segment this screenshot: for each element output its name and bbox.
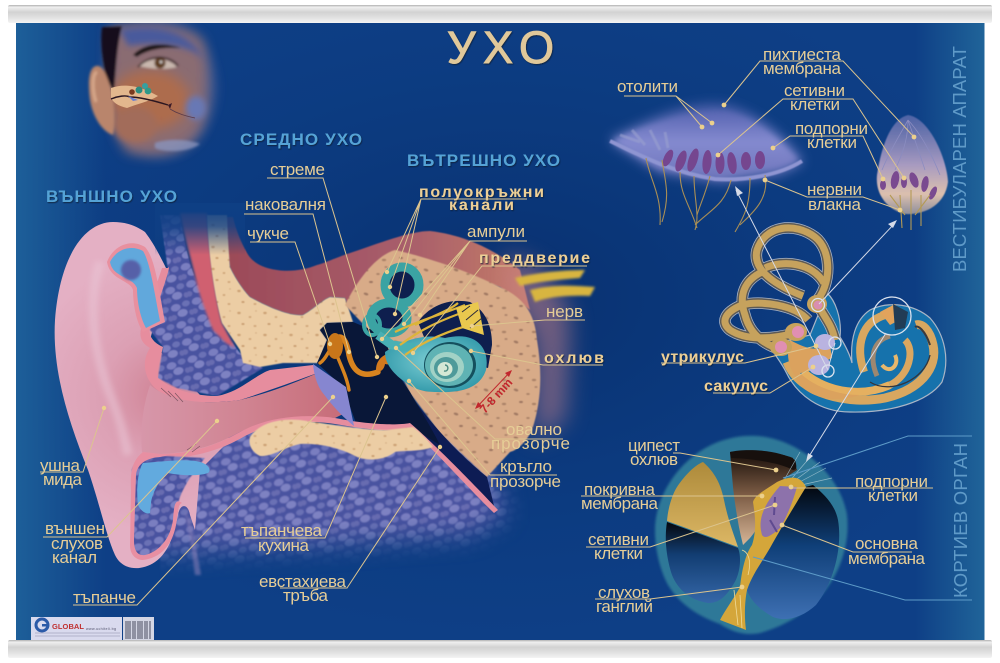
illustration: bony labyrinth: [725, 228, 946, 412]
label: round window: кръгло: [500, 457, 552, 476]
illustration: organ of Corti: [655, 436, 848, 634]
label: sensory cells, macula: клетки: [790, 95, 840, 114]
illustration: ear cross-section: [55, 203, 595, 580]
auditory nerve bundles: [515, 270, 595, 302]
label: supporting cells, organ of Corti: [789, 472, 933, 505]
heading: inner ear: ВЪТРЕШНО УХО: [407, 151, 560, 170]
label: eustachian tube: евстахиева: [259, 572, 347, 591]
temporal bone, upper: [207, 215, 353, 367]
label: tympanic cavity: кухина: [258, 536, 310, 555]
ossicles: [320, 333, 398, 390]
semicircular canals: [725, 228, 835, 350]
semicircular canals: [364, 267, 419, 335]
right blue shade on the face: [186, 96, 206, 120]
label: supporting cells, organ of Corti: клетки: [868, 486, 918, 505]
vestibular nerve fibres: [395, 303, 480, 355]
icon: publisher logo: [36, 619, 49, 631]
label: sensory cells, macula: сетивни: [784, 81, 845, 100]
label: stapes: стреме: [270, 160, 325, 179]
semicircular canal openings: [389, 271, 415, 299]
nerve fibres: [646, 158, 766, 232]
purple sensory cells: [760, 486, 797, 537]
label: tectorial membrane: покривна: [584, 480, 656, 499]
label: cochlear membrane: ципест: [628, 436, 680, 455]
label: pinna: ушна: [40, 456, 81, 475]
icon: warm cheek: [110, 70, 190, 130]
dark space behind the nerve: [418, 301, 492, 368]
right chamber: [747, 485, 839, 619]
inner pinna fold highlight: [93, 262, 128, 455]
lower canal wall: [160, 416, 498, 513]
maroon tissue band: [223, 217, 530, 315]
top hanging rail: [8, 5, 992, 23]
label: supporting cells, organ of Corti: подпорни: [855, 472, 928, 491]
publisher website: www.uchiteli.bg: [86, 627, 116, 631]
icon: lips and chin: [155, 140, 200, 151]
label: ampullae: ампули: [467, 222, 525, 241]
label: round window: прозорче: [490, 472, 561, 491]
lower bone: [249, 420, 433, 459]
label: semicircular canals: полуокръжни: [419, 184, 544, 201]
label: utricle: утрикулус: [661, 349, 744, 366]
label: oval window: прозорче: [491, 434, 570, 453]
ampullae: [770, 295, 827, 356]
red muscle band: [180, 213, 235, 348]
lower left chamber: [666, 522, 740, 603]
label: basilar membrane: мембрана: [848, 549, 926, 568]
label: basilar membrane: [780, 523, 926, 568]
label: pinna: [40, 406, 106, 489]
scala vestibuli yellow: [667, 462, 738, 547]
pointer arrows between the diagrams: [735, 186, 897, 462]
label: tympanic cavity: тъпанчева: [241, 521, 323, 540]
label: external auditory canal: [43, 419, 219, 567]
label: otoliths: отолити: [617, 77, 678, 96]
publisher name: GLOBAL: [52, 622, 84, 631]
glow behind inner ear bone: [505, 255, 570, 440]
label: otoliths: [617, 77, 714, 129]
black top band: [730, 450, 796, 470]
label: incus: наковалня: [245, 195, 326, 214]
label: gelatinous membrane: пихтиеста: [763, 45, 842, 64]
lower cell pocket: [132, 456, 205, 556]
vestibule tan base: [788, 340, 860, 399]
label: semicircular canals: [385, 184, 544, 316]
illustration: crista ampullaris: [877, 115, 948, 230]
label: sensory cells, organ of Corti: сетивни: [588, 530, 649, 549]
illustration: macula (statoconial membrane): [610, 104, 803, 232]
icon: eye: [139, 59, 177, 69]
label: cochlear membrane: охлюв: [630, 450, 678, 469]
label: stapes: [267, 160, 379, 359]
cochlea spiral: [424, 342, 476, 388]
label: nerve: нерв: [546, 302, 583, 321]
hair cells: [661, 147, 765, 175]
label: oval window: [394, 346, 570, 453]
label: utricle: [661, 344, 818, 366]
label: supporting cells, macula: [771, 119, 885, 181]
label: vestibule: преддверие: [479, 250, 590, 267]
label: nerve fibres: [763, 178, 902, 214]
label: spiral ganglion: [595, 583, 744, 616]
outer teal wall: [655, 436, 848, 634]
lower cell tissue: [160, 424, 517, 568]
label: spiral ganglion: слухов: [598, 583, 650, 602]
eardrum: [313, 364, 354, 426]
label: nerve fibres: влакна: [808, 195, 862, 214]
eustachian tube dark channel: [385, 392, 495, 510]
label: pinna: мида: [43, 470, 83, 489]
label: sensory cells, organ of Corti: клетки: [594, 544, 643, 563]
earlobe lilac fade: [184, 510, 201, 575]
icon: face skin: [108, 24, 208, 155]
label: cochlear membrane: [628, 436, 778, 472]
pinna outline: [55, 222, 230, 568]
scala media: [730, 451, 797, 545]
lower ear blue cartilage: [137, 460, 210, 513]
icon: ear: [89, 66, 114, 135]
cochlea detail cross-section in circle: [880, 304, 903, 325]
title: УХО: [447, 22, 554, 73]
vestibule and cochlea base: [385, 336, 487, 392]
label: saccule: сакулус: [704, 378, 768, 395]
label: gelatinous membrane: мембрана: [763, 59, 842, 78]
label: cochlea: [469, 349, 604, 367]
utricle and saccule: [815, 334, 835, 350]
heading: outer ear: ВЪНШНО УХО: [46, 187, 177, 206]
label: round window: [407, 379, 561, 491]
label: external auditory canal: външен: [45, 519, 105, 538]
label: eustachian tube: тръба: [283, 586, 329, 605]
label: oval window: овално: [506, 420, 562, 439]
cochlea spiral tubes: [787, 315, 934, 400]
fade of the tissue towards the top: [155, 203, 245, 255]
label: saccule: [704, 365, 815, 395]
label: sensory cells, organ of Corti: [586, 503, 777, 563]
label: nerve: [470, 302, 585, 328]
label: ampullae: [380, 222, 527, 341]
bracket lines: organ of Corti: [753, 436, 972, 600]
middle ear cavity: [317, 322, 440, 445]
concha pink rim: [140, 267, 320, 402]
fibres radiating to the right: [783, 452, 832, 486]
label: eardrum: [73, 395, 335, 607]
label: supporting cells, macula: клетки: [807, 133, 857, 152]
inset: ear anatomy on the face: [111, 83, 195, 118]
magnification circles: [812, 297, 911, 377]
icon: hair: [101, 26, 122, 92]
lower cell pocket pink rim: [130, 452, 182, 560]
label: tectorial membrane: [581, 480, 764, 513]
label: external auditory canal: канал: [52, 548, 97, 567]
label: eardrum: тъпанче: [73, 588, 136, 607]
ear canal: [141, 372, 347, 454]
label: tectorial membrane: мембрана: [581, 494, 659, 513]
label: external auditory canal: слухов: [51, 534, 103, 553]
membranous blue body and cochlea shell: [770, 293, 946, 412]
label: incus: [244, 195, 351, 354]
central yellow membrane and ganglion: [720, 478, 806, 630]
bottom hanging rail: [8, 640, 992, 658]
label: malleus: [247, 224, 332, 346]
label: vestibule: [411, 250, 590, 355]
label: malleus: чукче: [247, 224, 289, 243]
forehead highlight: [120, 28, 204, 60]
label: sensory cells, macula: [716, 81, 906, 180]
upper soft tissue cells: [150, 215, 263, 396]
label: basilar membrane: основна: [855, 534, 919, 553]
label: nerve fibres: нервни: [807, 180, 862, 199]
publisher label: [31, 617, 154, 641]
label: tympanic cavity: [241, 395, 388, 555]
vertical heading: vestibular apparatus: ВЕСТИБУЛАРЕН АПАРАТ: [949, 46, 970, 272]
illustration: face with ear location inset: [89, 20, 215, 156]
label: spiral ganglion: ганглий: [596, 597, 653, 616]
top ear blue cartilage pocket: [107, 243, 165, 332]
label: gelatinous membrane: [722, 45, 916, 139]
measurement arrow 7-8 mm: 7-8 mm: [477, 375, 515, 416]
vertical heading: organ of Corti: КОРТИЕВ ОРГАН: [950, 443, 971, 598]
small hairs in canal: [161, 388, 200, 452]
label: eustachian tube: [259, 445, 442, 605]
label: semicircular canals: канали: [449, 197, 514, 214]
label: supporting cells, macula: подпорни: [795, 119, 868, 138]
inner ear bone: [345, 250, 540, 477]
icon: eyebrow: [133, 45, 181, 57]
barcode: [123, 617, 154, 641]
label: cochlea: охлюв: [544, 350, 604, 367]
heading: middle ear: СРЕДНО УХО: [240, 130, 362, 149]
